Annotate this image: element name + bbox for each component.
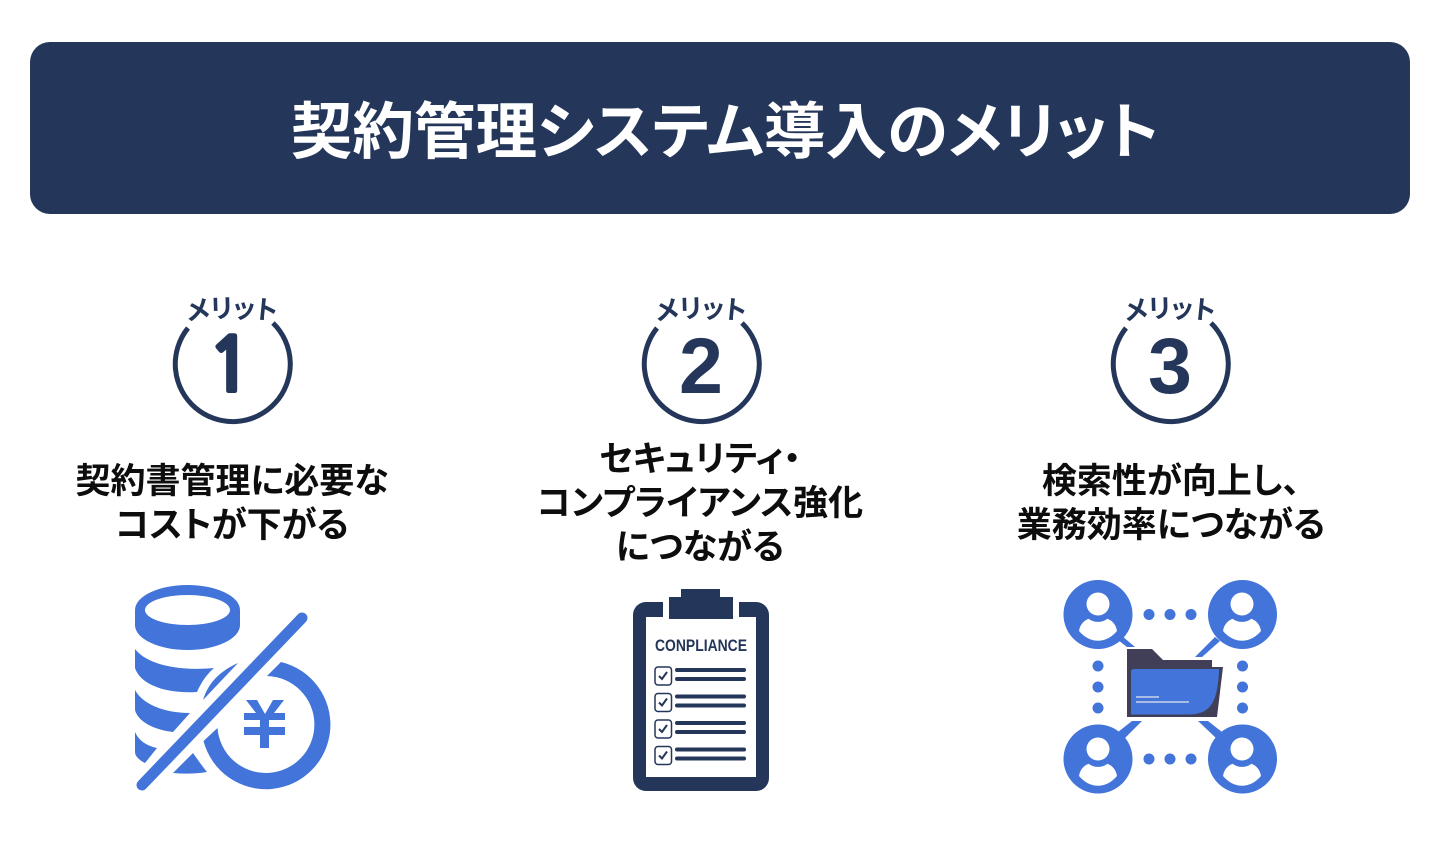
badge: merit 3 [1110,297,1231,424]
badge: merit 2: 2 [679,321,723,410]
text: merit 2 description: につながる [616,519,784,570]
text: merit 2 description [537,431,863,570]
text: merit 3 description: 検索性が向上し、 [1042,453,1300,504]
icon: compliance clipboard: CONPLIANCE [655,636,747,655]
title: 契約管理システム導入のメリット [291,82,1159,171]
text: merit 1 description: コストが下がる [115,497,349,548]
text: merit 3 description: 業務効率につながる [1017,497,1325,548]
text: merit 3 description [1017,453,1325,548]
badge: merit 2: メリット [658,297,744,322]
icon: compliance clipboard [633,589,769,791]
text: merit 2 description: コンプライアンス強化 [537,475,863,526]
badge: merit 1: メリット [188,297,276,322]
badge: merit 3: 3 [1148,321,1192,410]
badge: merit 3: メリット [1126,297,1214,322]
badge: merit 2 [642,297,762,424]
text: merit 2 description: セキュリティ・ [599,431,801,482]
badge: merit 1 [172,297,293,424]
title banner [30,42,1410,214]
icon: people network around folder [1064,580,1277,794]
text: merit 1 description [75,453,389,548]
badge: merit 1: 1 [207,330,252,404]
text: merit 1 description: 契約書管理に必要な [75,453,389,504]
icon: coins with yen and slash [135,585,330,790]
